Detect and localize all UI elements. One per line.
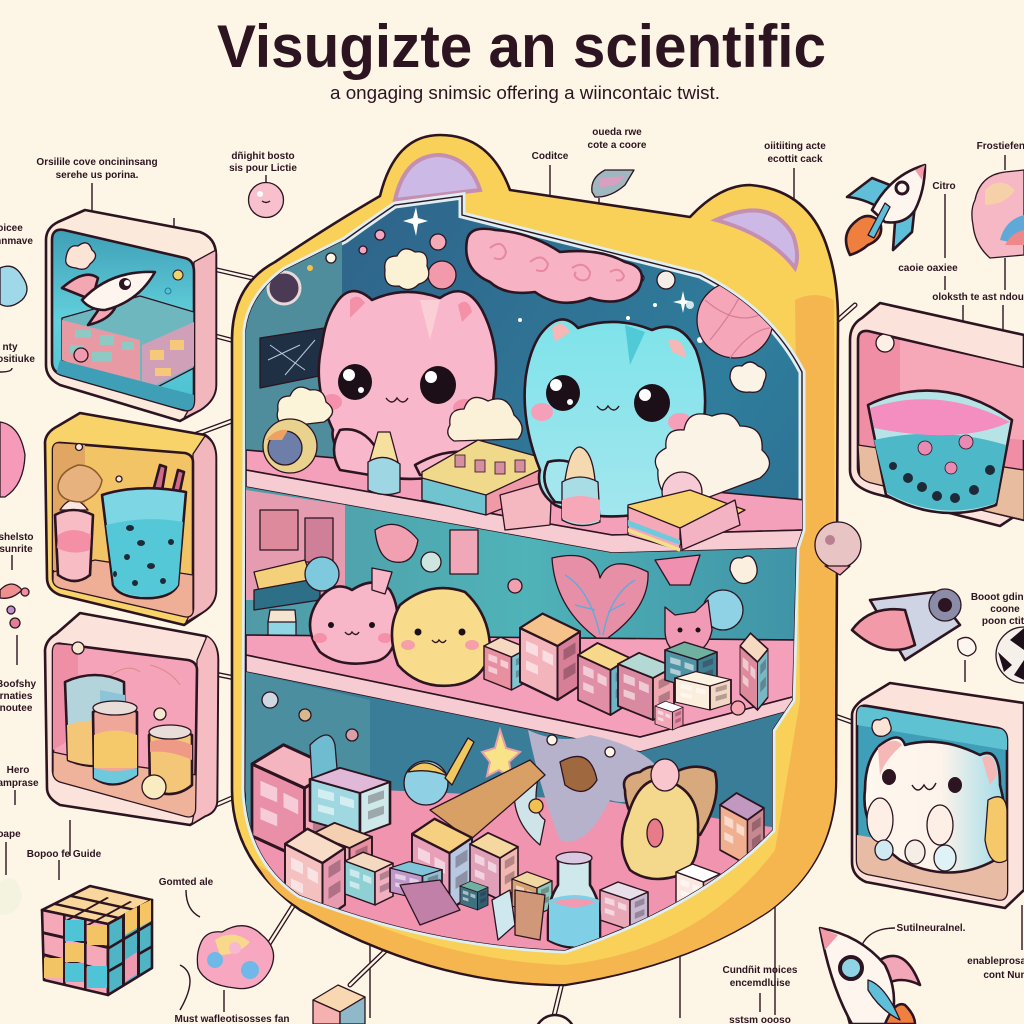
popcorn left	[277, 387, 333, 426]
football	[996, 627, 1024, 683]
cloud	[66, 243, 96, 269]
machine box	[422, 440, 552, 530]
annotation labels: oueda rwe	[592, 127, 642, 138]
pink cat	[319, 291, 496, 479]
middle shelf machines	[484, 614, 768, 730]
wall posters	[254, 510, 478, 610]
interior cutaway	[245, 196, 805, 960]
bubble tea cup	[102, 465, 186, 598]
annotation labels: dñighit bosto	[231, 151, 295, 162]
small bottle left of shelf	[368, 432, 400, 495]
brain top right	[972, 170, 1024, 258]
white cat	[864, 738, 1005, 872]
annotation labels: poon ctit	[982, 616, 1024, 627]
left beads	[0, 584, 29, 628]
panel: left cup and jar	[45, 413, 216, 625]
rocket bottom right	[820, 928, 920, 1024]
cotton candy	[197, 926, 274, 989]
hanging pink shapes	[375, 524, 418, 562]
rocket top right	[846, 165, 925, 255]
annotation labels: caoie oaxiee	[898, 263, 958, 274]
ball near popcorn	[661, 471, 703, 496]
wood ramp	[430, 760, 545, 840]
stars and bubbles	[307, 207, 703, 343]
jar 2	[93, 701, 137, 784]
rocket	[62, 272, 155, 325]
annotation labels: Cundñit moices	[722, 965, 798, 976]
panel: right white cat	[852, 683, 1024, 908]
annotation labels: ecottit cack	[767, 154, 823, 165]
milk bottle	[548, 852, 600, 948]
pink ball icon	[248, 182, 284, 218]
annotation labels: nty	[2, 342, 18, 353]
planet	[404, 738, 474, 805]
panel: left jars	[45, 613, 218, 825]
round porthole	[268, 272, 300, 304]
small pink cat	[310, 568, 398, 664]
left pink machine	[252, 692, 358, 860]
middle room wall	[246, 487, 805, 660]
left blue cloud	[0, 266, 27, 306]
rubik cube	[42, 886, 152, 995]
poster screen	[260, 328, 324, 388]
bottom room walls and floor	[246, 672, 800, 960]
globe	[263, 419, 317, 473]
panel: right boba	[850, 303, 1024, 526]
top room left wall	[246, 232, 342, 470]
brain heart	[552, 556, 648, 642]
bubble ball top right of gun	[815, 522, 861, 575]
blue cat	[525, 319, 705, 516]
yellow fluff	[985, 797, 1007, 862]
large popcorn right	[655, 414, 770, 508]
right ear inner	[716, 210, 797, 268]
jar 3	[149, 725, 192, 794]
annotation labels: Bopoo fe Guide	[27, 849, 102, 860]
main body: yellow bear shell	[232, 135, 838, 985]
circle at bottom	[535, 1015, 575, 1024]
connector lines	[186, 266, 855, 1020]
grey cloud creature	[514, 730, 660, 845]
annotation labels: Citro	[932, 181, 956, 192]
left ear inner	[395, 155, 480, 200]
ball	[142, 775, 166, 799]
blue balls	[305, 557, 743, 630]
annotation labels: oiitiiting acte	[764, 141, 826, 152]
jar 1	[65, 675, 125, 766]
annotation labels: Hero	[7, 765, 29, 776]
brown dog	[622, 759, 717, 879]
white popcorn right	[730, 362, 766, 392]
pink brain cloud	[466, 229, 642, 303]
small pink wall cat	[665, 600, 712, 654]
shelf 1	[246, 450, 805, 553]
small pink jar	[55, 500, 93, 581]
small cube	[313, 985, 365, 1024]
bottle on shelf	[562, 447, 600, 526]
annotation labels: Gomted ale	[159, 877, 214, 888]
annotation labels: Orsilile cove oncininsang	[36, 157, 158, 168]
tiled block	[55, 296, 194, 412]
shelf 2	[246, 635, 800, 752]
small yellow cat	[392, 588, 490, 686]
title: Visugizte an scientific	[217, 13, 826, 80]
large pink ball	[697, 282, 773, 358]
orange side band	[258, 295, 835, 984]
popcorn middle	[448, 397, 522, 441]
bottom machines cluster	[285, 768, 764, 940]
annotation labels: noutee	[0, 703, 33, 714]
annotation labels: Sutilneuralnel.	[897, 923, 966, 934]
blue cup	[267, 609, 297, 635]
annotation labels: sis pour Lictie	[229, 163, 297, 174]
left pink brain	[0, 422, 25, 497]
rainbow stack box	[628, 490, 745, 552]
annotation labels: coone	[990, 604, 1020, 615]
subtitle: a ongaging snimsic offering a wiincontaic twist.	[330, 83, 720, 103]
annotation labels: encemdluise	[730, 978, 791, 989]
capsule icon	[592, 170, 634, 197]
pink ball	[74, 348, 88, 362]
boba cup	[868, 391, 1012, 513]
popcorn cloud	[58, 465, 102, 502]
space gun	[852, 589, 976, 660]
left white puff	[0, 878, 22, 915]
star	[482, 730, 520, 778]
panel: left rocket tank	[46, 210, 216, 421]
annotation labels: sunrite	[0, 544, 33, 555]
white popcorn cluster top	[385, 249, 429, 290]
annotation labels: serehe us porina.	[56, 170, 139, 181]
annotation labels: rnaties	[0, 691, 33, 702]
annotation labels: Coditce	[532, 151, 569, 162]
annotation labels: cote a coore	[588, 140, 647, 151]
